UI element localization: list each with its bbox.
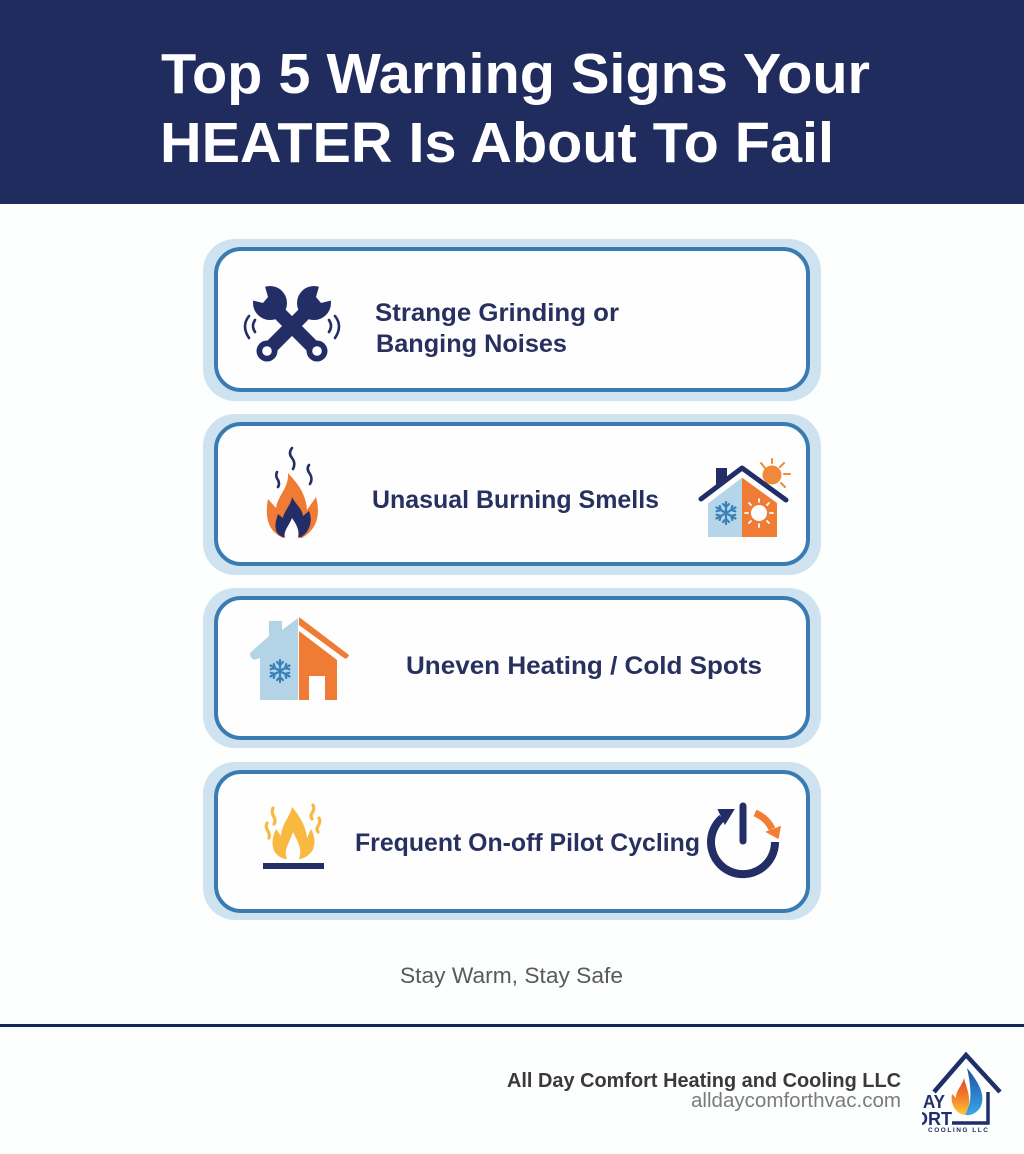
header band bbox=[0, 0, 1024, 204]
label: Uneven Heating / Cold Spots bbox=[406, 652, 762, 680]
icon: crossed wrenches bbox=[245, 283, 339, 362]
icon: house with sun and snow bbox=[701, 459, 790, 537]
footer company text bbox=[507, 1070, 901, 1112]
title: HEATER Is About To Fail bbox=[160, 111, 834, 175]
tagline: Stay Warm, Stay Safe bbox=[400, 963, 623, 988]
logo bbox=[914, 1055, 1000, 1134]
label: Unasual Burning Smells bbox=[372, 486, 659, 514]
panel: pilot cycling bbox=[203, 762, 821, 920]
label: Banging Noises bbox=[376, 330, 567, 358]
icon: power cycle bbox=[711, 806, 780, 874]
icon: half cold half warm house bbox=[250, 617, 349, 700]
title: Top 5 Warning Signs Your bbox=[161, 42, 870, 106]
panel: grinding noises bbox=[203, 239, 821, 401]
title bbox=[160, 42, 870, 175]
logo: ORT bbox=[914, 1109, 952, 1129]
icon: pilot flame bbox=[263, 805, 324, 869]
panel: uneven heating bbox=[203, 588, 821, 748]
footer company text: All Day Comfort Heating and Cooling LLC bbox=[507, 1070, 901, 1092]
logo: COOLING LLC bbox=[928, 1127, 988, 1134]
panel: burning smells bbox=[203, 414, 821, 575]
label bbox=[375, 299, 619, 358]
label: Strange Grinding or bbox=[375, 299, 619, 327]
footer rule bbox=[0, 1024, 1024, 1027]
label: Frequent On-off Pilot Cycling bbox=[355, 829, 700, 857]
icon: flame with smoke bbox=[267, 448, 318, 538]
footer company text: alldaycomforthvac.com bbox=[691, 1090, 901, 1112]
logo: AY bbox=[923, 1092, 945, 1112]
